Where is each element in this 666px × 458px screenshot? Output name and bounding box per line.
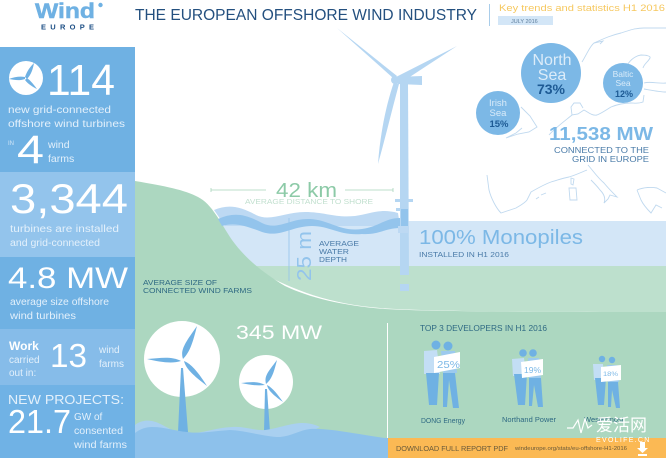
stat: 25 m water depth [289,218,359,281]
chart: DONG Energy 25%: DONG Energy [421,416,465,425]
stat: 114 turbines: 114 [47,56,115,105]
chart: Northand Power 19%: Northand Power [502,415,556,424]
stat: 4.8 MW: 4.8 MW [8,262,129,295]
stat: work in 13 wind farms: Work [9,339,39,353]
logo: WindEurope [35,0,103,32]
stat: new projects 21.7 GW: NEW PROJECTS: [8,393,124,407]
callout: Irish Sea 15%: Sea [490,108,507,119]
stat: 25 m water depth: 25 m [294,231,316,281]
chart: DONG Energy 25% [421,340,465,425]
callout: Baltic Sea 12%: Baltic [613,69,634,79]
logo: WindEurope: Wind [35,0,95,23]
watermark: EVOLIFE.CN: EVOLIFE.CN [596,437,651,444]
stat: 114 turbines [8,56,125,172]
icon: small turbine in circle [239,355,293,432]
chart: Northand Power 19%: 19% [524,366,541,375]
stat: work in 13 wind farms [9,337,124,379]
map: outline of Europe [487,28,666,213]
panel: left statistics column [0,47,135,458]
title divider [489,4,490,26]
callout: North Sea 73%: 73% [537,81,566,97]
stat: 11,538 MW connected [549,123,654,164]
icon: download arrow [637,442,648,456]
icon: turbine in circle [9,61,43,95]
stat: new projects 21.7 GW [8,393,127,451]
stat: 42 km distance to shore: 42 km [276,180,337,202]
stat: 100% monopiles [419,227,583,259]
date badge [498,16,553,25]
panel: download bar [380,438,666,458]
callout: Irish Sea 15%: Irish [489,98,507,109]
callout: North Sea 73% [521,43,581,103]
stat: 114 turbines: farms [48,153,74,165]
stat: 100% monopiles: INSTALLED IN H1 2016 [419,250,509,259]
heading: top 3 developers: TOP 3 DEVELOPERS IN H1 2016 [420,324,548,333]
stat: work in 13 wind farms: out in: [9,368,36,379]
stat: 4.8 MW: wind turbines [9,311,76,322]
stat: 114 turbines: wind [47,139,70,151]
stat: 25 m water depth: WATER [319,247,350,256]
label: average size of wind farms: CONNECTED WIND FARMS [143,286,252,295]
chart: DONG Energy 25%: 25% [437,359,460,371]
stat: new projects 21.7 GW: wind farms [73,440,127,451]
stat: work in 13 wind farms: carried [9,355,40,366]
callout: Baltic Sea 12% [603,63,643,103]
callout: Baltic Sea 12%: Sea [615,78,631,88]
stat: new projects 21.7 GW: consented [74,426,123,437]
label: average size of wind farms [143,278,252,295]
subtitle: Key trends and statistics H1 2016 [499,3,665,14]
stat: 11,538 MW connected: CONNECTED TO THE [554,145,649,155]
stat: 100% monopiles: 100% Monopiles [419,227,583,249]
stat: work in 13 wind farms: wind [98,345,120,356]
stat: 42 km distance to shore [211,180,393,206]
stat: work in 13 wind farms: farms [99,359,124,370]
stat: 4.8 MW [8,262,129,322]
stat: 25 m water depth: AVERAGE [319,239,359,248]
callout: Irish Sea 15% [476,91,520,135]
stat: 114 turbines: offshore wind turbines [8,119,125,130]
stat: 345 MW: 345 MW [236,323,322,344]
stat: 3,344 turbines: turbines are installed [10,224,119,235]
watermark: EVOLIFE.CN: 爱活网 [596,416,647,435]
stat: 3,344 turbines: and grid-connected [10,238,100,249]
stat: 25 m water depth: DEPTH [319,255,347,264]
icon: large offshore turbine [337,28,457,291]
section divider [387,323,388,438]
chart: third developer 18%: Westermost [584,415,625,424]
callout: Irish Sea 15%: 15% [489,119,509,130]
stat: 114 turbines: IN [8,141,14,147]
stat: new projects 21.7 GW: 21.7 [8,403,71,440]
callout: Baltic Sea 12%: 12% [615,89,633,99]
panel: download bar: DOWNLOAD FULL REPORT PDF [396,444,508,453]
stat: 114 turbines: new grid-connected [8,105,111,116]
callout: North Sea 73%: Sea [538,67,566,84]
chart: Northand Power 19% [502,349,556,424]
stat: work in 13 wind farms: 13 [50,337,87,374]
chart: third developer 18% [584,356,625,424]
stat: 114 turbines: 4 [17,128,44,172]
icon: large turbine in circle [144,321,220,432]
stat: 4.8 MW: average size offshore [10,297,109,308]
title: THE EUROPEAN OFFSHORE WIND INDUSTRY [135,7,477,24]
date badge: JULY 2016 [511,19,538,25]
stat: 42 km distance to shore: AVERAGE DISTANCE TO SHORE [245,197,373,206]
stat: 11,538 MW connected: GRID IN EUROPE [572,154,649,164]
watermark: EVOLIFE.CN [567,416,651,444]
stat: 3,344 turbines [10,175,128,249]
stat: 3,344 turbines: 3,344 [10,175,128,222]
panel: download bar: windeurope.org/stats/eu-offshore-H1-2016 [514,446,627,452]
logo: WindEurope: EUROPE [41,22,94,32]
chart: lower waves [135,421,385,458]
chart: third developer 18%: 18% [603,371,618,378]
label: average size of wind farms: AVERAGE SIZE OF [143,278,217,287]
stat: 11,538 MW connected: 11,538 MW [549,123,654,144]
stat: new projects 21.7 GW: GW of [74,412,103,423]
panel: seabed and land background [135,181,666,458]
callout: North Sea 73%: North [532,52,572,69]
chart: sea waves [214,207,400,234]
